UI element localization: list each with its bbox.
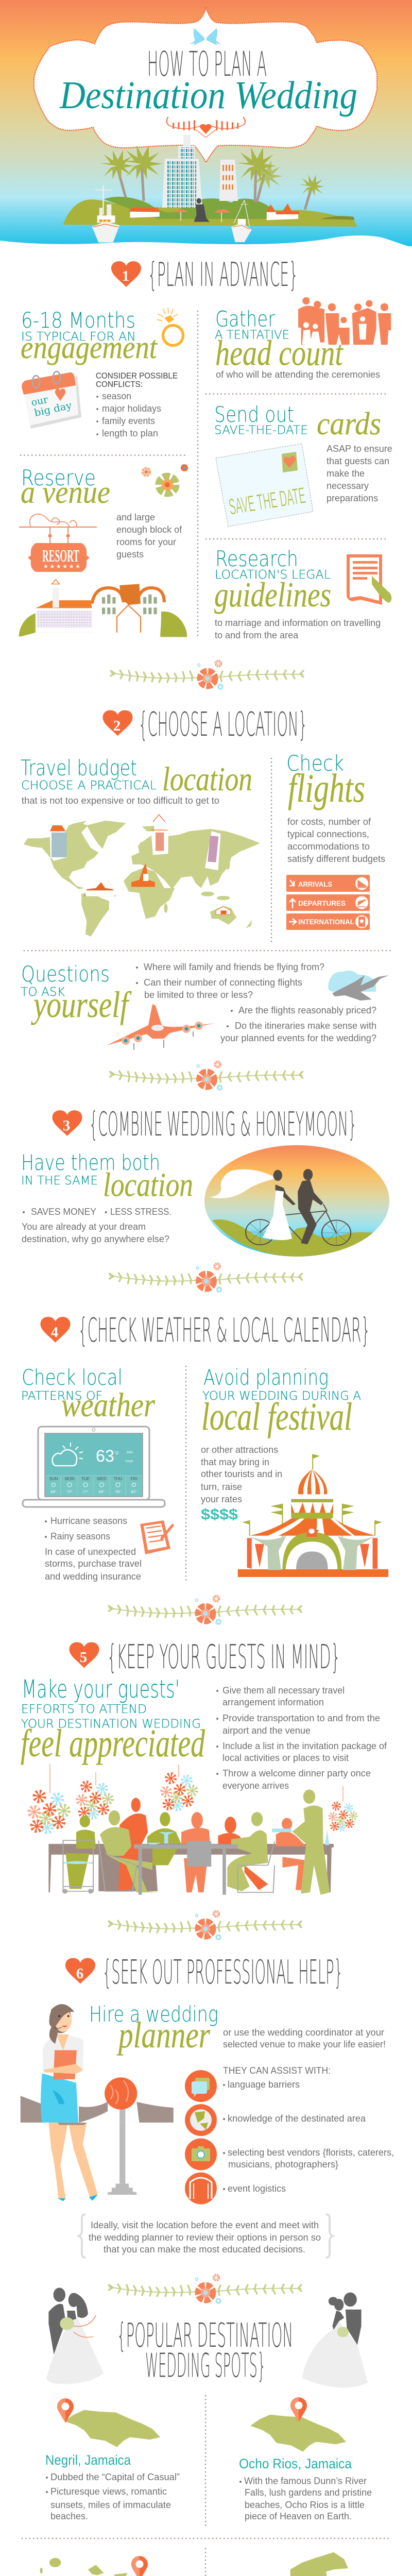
panel: travel budget: that is not too expensive or too difficult to get to: [22, 795, 219, 806]
icon: laptop weather display: THU: [114, 1477, 122, 1481]
panel: check flights: accommodations to: [287, 841, 370, 852]
panel: hire a wedding planner: planner: [116, 2014, 211, 2056]
panel: save the date: SAVE THE DATE: [227, 483, 307, 520]
text: weather notes: Hurricane seasons: [50, 1516, 127, 1526]
text: weather notes: Rainy seasons: [50, 1531, 110, 1541]
panel: make guests feel appreciated: YOUR DESTINATION WEDDING: [21, 1718, 201, 1731]
panel: check flights: flights: [288, 766, 365, 810]
panel: legal guidelines: LOCATION'S LEGAL: [215, 568, 331, 582]
panel: travel budget: [21, 755, 260, 937]
panel: avoid local festival: your rates: [201, 1494, 242, 1504]
panel: hire a wedding planner: THEY CAN ASSIST WITH:: [223, 2065, 331, 2076]
panel: travel budget: Travel budget: [21, 755, 137, 781]
icon: laptop weather display: WED: [97, 1477, 107, 1481]
icon: laptop weather display: 63: [96, 1447, 114, 1465]
section 3 heading: 3: [63, 1117, 70, 1134]
text: weather notes: [45, 1516, 142, 1582]
panel: travel budget: CHOOSE A PRACTICAL: [21, 779, 157, 792]
panel: check flights: [286, 751, 385, 930]
houses and umbrellas: [129, 204, 299, 223]
text: benefits: destination, why go anywhere else?: [22, 1234, 169, 1244]
panel: Maui, Hawaii: [40, 2556, 182, 2576]
list of guest tips: Provide transportation to and from the: [222, 1713, 380, 1723]
panel: check flights: for costs, number of: [287, 817, 371, 827]
map: Italy: [290, 2552, 389, 2576]
list of guest tips: Include a list in the invitation package of: [222, 1741, 387, 1751]
icon: laptop weather display: MON: [65, 1477, 75, 1481]
panel: engagement: 6-18 Months: [21, 308, 135, 333]
icon: orange plane: [107, 1004, 214, 1050]
text: weather notes: and wedding insurance: [45, 1571, 141, 1582]
panel: make guests feel appreciated: Make your guests': [22, 1675, 180, 1704]
icon: laptop weather display: FRI: [131, 1477, 137, 1481]
divider: [271, 758, 272, 942]
divider: [205, 2396, 206, 2529]
list item: vendors: selecting best vendors {florists, caterers,: [228, 2147, 394, 2158]
floral divider: [109, 2275, 301, 2303]
panel: Sorrento, Italy: [223, 2552, 389, 2576]
island base and hills: [63, 197, 357, 227]
illustration: couple left: [46, 2287, 104, 2384]
panel: reserve a venue: a venue: [21, 475, 110, 510]
icon: laptop weather display: 69%: [127, 1451, 133, 1454]
panel: save the date: ASAP to ensure: [327, 444, 392, 454]
list of guest tips: everyone arrives: [222, 1781, 289, 1791]
list of guest tips: airport and the venue: [222, 1725, 311, 1736]
icon: resort sign: [19, 514, 97, 572]
panel: Ocho Rios, Jamaica: With the famous Dunn’s River: [244, 2476, 367, 2486]
panel: check flights: typical connections,: [287, 829, 369, 839]
icon: wedding arch: [185, 2173, 217, 2205]
icon: engagement ring: [157, 308, 183, 345]
section 5 heading: [69, 1638, 340, 1676]
icon: resort building: [19, 580, 187, 637]
white wave edge below ocean: [0, 235, 412, 263]
callout: visit the location: that you can make the most educated decisions.: [104, 2244, 305, 2255]
icon: resort sign: RESORT: [42, 547, 79, 566]
panel: avoid local festival: [201, 1365, 388, 1577]
illustration: dinner party: [48, 1789, 334, 1895]
illustration: hanging flowers: [30, 1764, 356, 1832]
divider: [21, 454, 188, 456]
section 2 heading: [103, 706, 307, 744]
icon: gray plane and cloud: [328, 971, 389, 1001]
text: weather notes: In case of unexpected: [45, 1547, 136, 1557]
map: Jamaica: [250, 2415, 346, 2452]
list item: vendors: [223, 2147, 394, 2170]
list item: local knowledge: knowledge of the destinated area: [228, 2113, 366, 2124]
illustration: tropical island scene: [63, 135, 357, 243]
text: possible conflicts: major holidays: [102, 403, 161, 414]
text: possible conflicts: family events: [102, 416, 155, 426]
panel: Ocho Rios, Jamaica: Falls, lush gardens and pristine: [245, 2487, 372, 2498]
text: benefits: [22, 1207, 171, 1244]
icon: location pin: [290, 2397, 307, 2422]
panel: hire a wedding planner: Hire a wedding: [89, 2002, 218, 2027]
button: arrivals: ARRIVALS: [298, 880, 332, 888]
list of questions: Can their number of connecting flights: [144, 977, 302, 988]
list item: event logistics: event logistics: [228, 2183, 286, 2194]
panel: avoid local festival: local festival: [201, 1395, 352, 1438]
panel: questions to ask yourself: yourself: [30, 984, 132, 1025]
panel: save the date: SAVE-THE-DATE: [214, 423, 308, 437]
list of guest tips: arrangement information: [222, 1697, 324, 1707]
icon: camera: [185, 2138, 217, 2170]
panel: avoid local festival: $$$$: [201, 1506, 238, 1523]
panel: hire a wedding planner: or use the wedding coordinator at your: [223, 2027, 384, 2038]
section 6 heading: [65, 1954, 343, 1992]
panel: make guests feel appreciated: EFFORTS TO ATTEND: [21, 1703, 147, 1716]
illustration: bride and groom on tandem bicycle: [204, 1145, 389, 1257]
panel: head count: of who will be attending the ceremonies: [216, 369, 380, 380]
floral divider: [109, 1911, 301, 1939]
panel: save the date: necessary: [327, 481, 369, 491]
icon: laptop weather display: 77°: [82, 1489, 89, 1494]
callout: visit the location: [79, 2214, 333, 2258]
panel: Negril, Jamaica: Dubbed the “Capital of Casual”: [50, 2472, 180, 2482]
list of questions: be limited to three or less?: [144, 990, 253, 1000]
map: Jamaica: [64, 2410, 160, 2447]
icon: laptop weather display: 69°: [99, 1489, 105, 1494]
callout: visit the location: the wedding planner to review their options in person so: [89, 2232, 321, 2243]
panel: avoid local festival: that may bring in: [201, 1457, 269, 1467]
panel: Ocho Rios, Jamaica: [239, 2397, 372, 2521]
divider: [197, 311, 198, 639]
panel: reserve a venue: rooms for your: [116, 537, 176, 547]
icon: laptop weather display: 84°: [50, 1489, 57, 1494]
section 1 heading: [111, 256, 298, 294]
world map: [24, 814, 260, 937]
icon: document and pen: [347, 554, 391, 605]
list of questions: [136, 962, 376, 1043]
text: benefits: LESS STRESS.: [110, 1207, 171, 1217]
panel: reserve a venue: [19, 464, 188, 637]
panel: check weather: PATTERNS OF: [21, 1389, 102, 1403]
panel: hire a wedding planner: selected venue to make your life easier!: [223, 2039, 386, 2049]
section 1 heading: 1: [122, 268, 129, 284]
illustration: couple right: [302, 2293, 368, 2388]
map: Hawaii islands: [40, 2558, 182, 2576]
icon: calendar our big day: our: [30, 394, 49, 409]
icon: laptop weather display: 1mph: [125, 1460, 133, 1463]
panel: travel budget: location: [162, 760, 252, 798]
text: possible conflicts: [96, 372, 178, 438]
panel: check flights: satisfy different budgets: [287, 854, 385, 864]
panel: Negril, Jamaica: sunsets, miles of immaculate: [50, 2500, 171, 2510]
floral divider: [111, 661, 303, 689]
section 2 heading: 2: [113, 718, 121, 734]
panel: Ocho Rios, Jamaica: Ocho Rios, Jamaica: [239, 2456, 352, 2471]
divider: [22, 2538, 390, 2539]
list of guest tips: [216, 1685, 387, 1791]
divider: [24, 950, 391, 951]
panel: save the date: make the: [327, 468, 365, 479]
panel: legal guidelines: to marriage and information on travelling: [215, 618, 381, 628]
couple silhouette: [194, 198, 210, 222]
panel: check weather: [21, 1365, 174, 1582]
panel: check flights: Check: [286, 751, 344, 776]
panel: Ocho Rios, Jamaica: beaches, Ocho Rios is a little: [245, 2500, 365, 2510]
map buildings: [50, 814, 67, 861]
panel: avoid local festival: YOUR WEDDING DURING A: [202, 1389, 361, 1403]
panel: avoid local festival: Avoid planning: [203, 1365, 329, 1390]
panel: engagement: IS TYPICAL FOR AN: [21, 330, 136, 344]
button: international: [286, 913, 370, 930]
icon: laptop weather display: 76°: [115, 1489, 121, 1494]
section 5 heading: 5: [80, 1649, 87, 1666]
text: possible conflicts: CONSIDER POSSIBLE: [96, 372, 178, 380]
icon: location pin: [131, 2556, 148, 2576]
panel: Negril, Jamaica: [45, 2398, 180, 2521]
panel: avoid local festival: turn, raise: [201, 1482, 242, 1492]
title: [59, 44, 357, 117]
icon: laptop weather display: °F: [114, 1451, 119, 1456]
panel: legal guidelines: to and from the area: [215, 630, 299, 640]
section 4 heading: 4: [51, 1324, 58, 1341]
icon: heart wreath: [167, 117, 245, 138]
heading: popular spots: [117, 2317, 293, 2385]
list of questions: Where will family and friends be flying from?: [144, 962, 324, 972]
icon: flowers: [143, 464, 188, 493]
list of guest tips: Throw a welcome dinner party once: [222, 1768, 371, 1778]
panel: save the date: that guests can: [327, 456, 389, 466]
header ornate frame: [34, 8, 377, 162]
text: benefits: SAVES MONEY: [31, 1207, 96, 1217]
panel: legal guidelines: Research: [215, 546, 298, 571]
icon: two doves: [189, 28, 221, 45]
list of guest tips: Give them all necessary travel: [222, 1685, 345, 1696]
panel: questions to ask yourself: Questions: [21, 961, 110, 987]
list of questions: your planned events for the wedding?: [220, 1033, 376, 1043]
text: benefits: You are already at your dream: [22, 1222, 146, 1232]
panel: head count: head count: [215, 334, 344, 373]
icon: calendar our big day: big day: [33, 400, 73, 419]
icon: laptop weather display: 82°: [131, 1489, 137, 1494]
icon: globe: [185, 2104, 217, 2136]
icon: notepad and pencil: [140, 1520, 174, 1554]
floral divider: [109, 1264, 302, 1292]
button: arrivals: [286, 875, 370, 892]
panel: head count: Gather: [215, 306, 276, 332]
title: Destination Wedding: [59, 74, 357, 117]
panel: save the date: [214, 402, 392, 527]
panel: Negril, Jamaica: beaches.: [50, 2511, 88, 2521]
panel: legal guidelines: guidelines: [214, 575, 331, 614]
panel: have them both: Have them both: [21, 1150, 160, 1175]
panel: head count: [215, 297, 391, 380]
panel: questions to ask yourself: TO ASK: [21, 986, 65, 999]
panel: engagement: engagement: [21, 330, 158, 365]
panel: make guests feel appreciated: [21, 1675, 387, 1895]
panel: check weather: Check local: [22, 1365, 123, 1390]
panel: reserve a venue: Reserve: [21, 465, 96, 490]
list of questions: Are the flights reasonably priced?: [238, 1005, 376, 1015]
button: departures: [286, 894, 370, 911]
panel: reserve a venue: enough block of: [116, 524, 182, 535]
list item: language barriers: language barriers: [228, 2079, 300, 2090]
illustration: wedding planner woman and bouquet stand: [21, 2004, 174, 2201]
text: possible conflicts: CONFLICTS:: [96, 380, 143, 389]
icon: laptop weather display: 72°: [66, 1489, 73, 1494]
cruise ship and sailboat: [92, 185, 252, 243]
panel: engagement: [21, 308, 183, 438]
text: weather notes: storms, purchase travel: [45, 1558, 142, 1569]
panel: hire a wedding planner: [21, 2002, 394, 2205]
background: sunset sky and ocean header: [0, 0, 412, 246]
icon: laptop weather display: SUN: [49, 1477, 58, 1481]
list of questions: Do the itineraries make sense with: [235, 1021, 376, 1031]
list item: vendors: musicians, photographers}: [228, 2159, 338, 2170]
divider: [206, 393, 386, 395]
panel: check weather: weather: [61, 1386, 155, 1424]
list of guest tips: local activities or places to visit: [222, 1753, 349, 1763]
hotel towers: [162, 135, 238, 208]
panel: have them both: location: [103, 1166, 193, 1204]
icon: save the date card: [216, 444, 313, 527]
floral divider: [109, 1596, 301, 1624]
button: international: INTERNATIONAL: [298, 918, 354, 926]
panel: avoid local festival: other tourists and in: [201, 1469, 282, 1479]
divider: [206, 538, 386, 539]
panel: save the date: Send out: [214, 402, 294, 427]
floral divider: [110, 1062, 303, 1090]
divider: [205, 2549, 206, 2576]
panel: reserve a venue: guests: [116, 549, 144, 560]
icon: laptop weather display: [23, 1427, 165, 1507]
icon: location pin: [57, 2398, 74, 2423]
illustration: festival tent: [238, 1454, 388, 1577]
palm trees: [100, 145, 324, 210]
panel: save the date: preparations: [327, 493, 378, 503]
divider: [185, 1366, 186, 1581]
panel: legal guidelines: [214, 546, 391, 640]
panel: reserve a venue: and large: [116, 512, 155, 522]
text: possible conflicts: season: [102, 391, 131, 401]
icon: resort sign: ★★★★★★: [43, 564, 80, 570]
callout: visit the location: Ideally, visit the location before the event and meet with: [91, 2220, 319, 2230]
icon: family group: [298, 297, 391, 345]
panel: questions to ask yourself: [21, 961, 389, 1050]
icon: calendar our big day: [22, 371, 81, 429]
button: departures: DEPARTURES: [298, 899, 346, 907]
panel: Ocho Rios, Jamaica: piece of Heaven on Earth.: [245, 2511, 352, 2521]
panel: head count: A TENTATIVE: [215, 329, 289, 342]
panel: have them both: [21, 1145, 389, 1257]
icon: laptop weather display: TUE: [81, 1477, 90, 1481]
panel: have them both: IN THE SAME: [21, 1174, 98, 1188]
section 6 heading: 6: [76, 1965, 83, 1982]
panel: save the date: cards: [317, 406, 381, 442]
panel: Negril, Jamaica: Picturesque views, romantic: [50, 2486, 167, 2497]
panel: make guests feel appreciated: feel appreciated: [21, 1722, 205, 1765]
text: possible conflicts: length to plan: [102, 428, 158, 438]
panel: Negril, Jamaica: Negril, Jamaica: [45, 2452, 131, 2468]
panel: avoid local festival: or other attractions: [201, 1445, 278, 1455]
icon: speech bubbles: [185, 2070, 217, 2102]
